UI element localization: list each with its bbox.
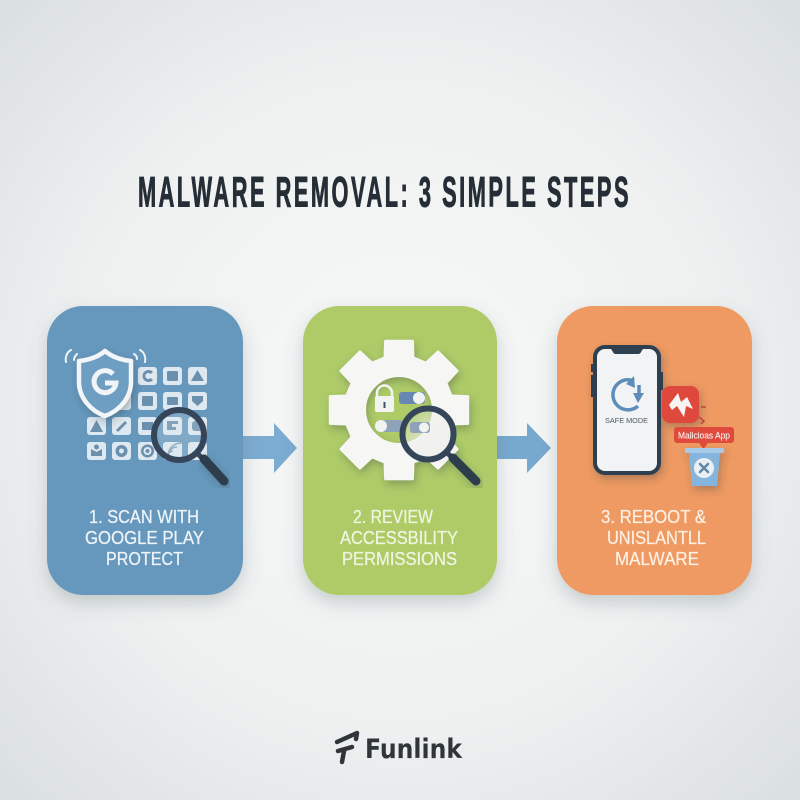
icon: bug legs xyxy=(699,407,706,424)
icon: shield with G xyxy=(79,351,131,416)
step 1 label xyxy=(85,507,204,569)
panel: step 2 accessibility xyxy=(303,306,497,595)
icon: magnifying glass xyxy=(402,408,476,481)
icon: toggle off xyxy=(375,420,405,432)
step 3 label: MALWARE xyxy=(615,549,699,569)
arrow: step 1 to step 2 xyxy=(243,423,297,473)
step 1 label: GOOGLE PLAY xyxy=(85,528,204,548)
logo: Funlink xyxy=(337,733,463,765)
step 3 label: UNISLANTLL xyxy=(607,528,706,548)
icon: magnifying glass xyxy=(154,410,224,481)
icon: phone xyxy=(591,345,663,475)
icon: signal waves xyxy=(66,350,145,362)
step 2 label: 2. REVIEW xyxy=(353,507,433,527)
panel: step 3 reboot xyxy=(557,306,752,595)
icon: logo mark xyxy=(337,733,357,762)
safe mode label: SAFE MODE xyxy=(605,416,648,425)
callout: malicious app: Malicioas App xyxy=(678,430,730,442)
icon: padlock xyxy=(375,386,394,412)
arrow: step 2 to step 3 xyxy=(497,423,551,473)
icon: toggle on xyxy=(399,392,425,404)
step 2 label: PERMISSIONS xyxy=(342,549,457,569)
icon: gear xyxy=(330,341,468,479)
callout: malicious app xyxy=(674,427,734,449)
icon: reboot arrows xyxy=(613,376,644,410)
logo wordmark: Funlink xyxy=(365,734,463,765)
icon grid: app tiles xyxy=(87,367,207,460)
step 1 label: 1. SCAN WITH xyxy=(89,507,199,527)
icon: malicious app xyxy=(662,386,699,423)
step 3 label xyxy=(601,507,706,569)
step 1 label: PROTECT xyxy=(106,549,183,569)
icon: trash bin xyxy=(685,448,724,486)
step 2 label: ACCESSBILITY xyxy=(340,528,458,548)
step 3 label: 3. REBOOT & xyxy=(601,507,706,527)
step 2 label xyxy=(340,507,458,569)
panel: step 1 scan xyxy=(47,306,243,595)
